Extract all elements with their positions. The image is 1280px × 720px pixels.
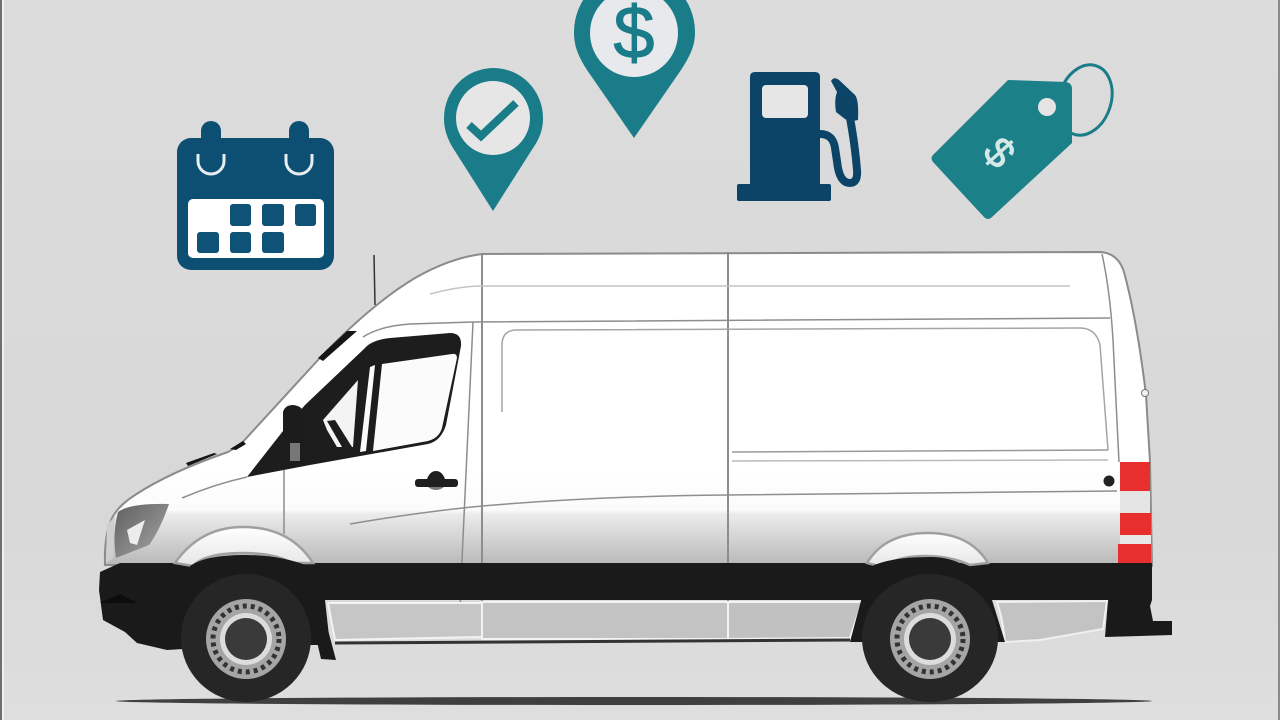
antenna: [374, 255, 375, 305]
icon: location pin with dollar sign: [574, 0, 695, 138]
lower body band: [99, 563, 1172, 660]
panel lines: [182, 252, 1119, 640]
rear door dot: [1104, 476, 1114, 486]
front wheel arch: [175, 527, 330, 645]
door handle: [415, 471, 458, 490]
rear wheel arch: [850, 533, 1005, 642]
wing mirror: [283, 405, 304, 465]
ground shadow: [116, 697, 1152, 705]
cab window: [247, 333, 461, 477]
van: [99, 252, 1172, 705]
icon: calendar: [177, 121, 334, 270]
icon: location pin with check mark: [444, 68, 543, 211]
front wheel: [181, 574, 311, 702]
rear wheel: [862, 574, 998, 702]
headlight: [106, 504, 169, 563]
van body shell: [105, 252, 1152, 566]
tail lights: [1118, 462, 1151, 563]
wiper and hood markers: [186, 331, 357, 466]
sill panels: [328, 601, 1107, 643]
icon: price tag with dollar sign: [932, 58, 1121, 219]
icon: fuel pump: [737, 72, 858, 201]
rear marker knob: [1142, 390, 1148, 396]
icon: price tag with dollar sign: $: [974, 128, 1025, 177]
front bumper vent: [100, 594, 137, 603]
